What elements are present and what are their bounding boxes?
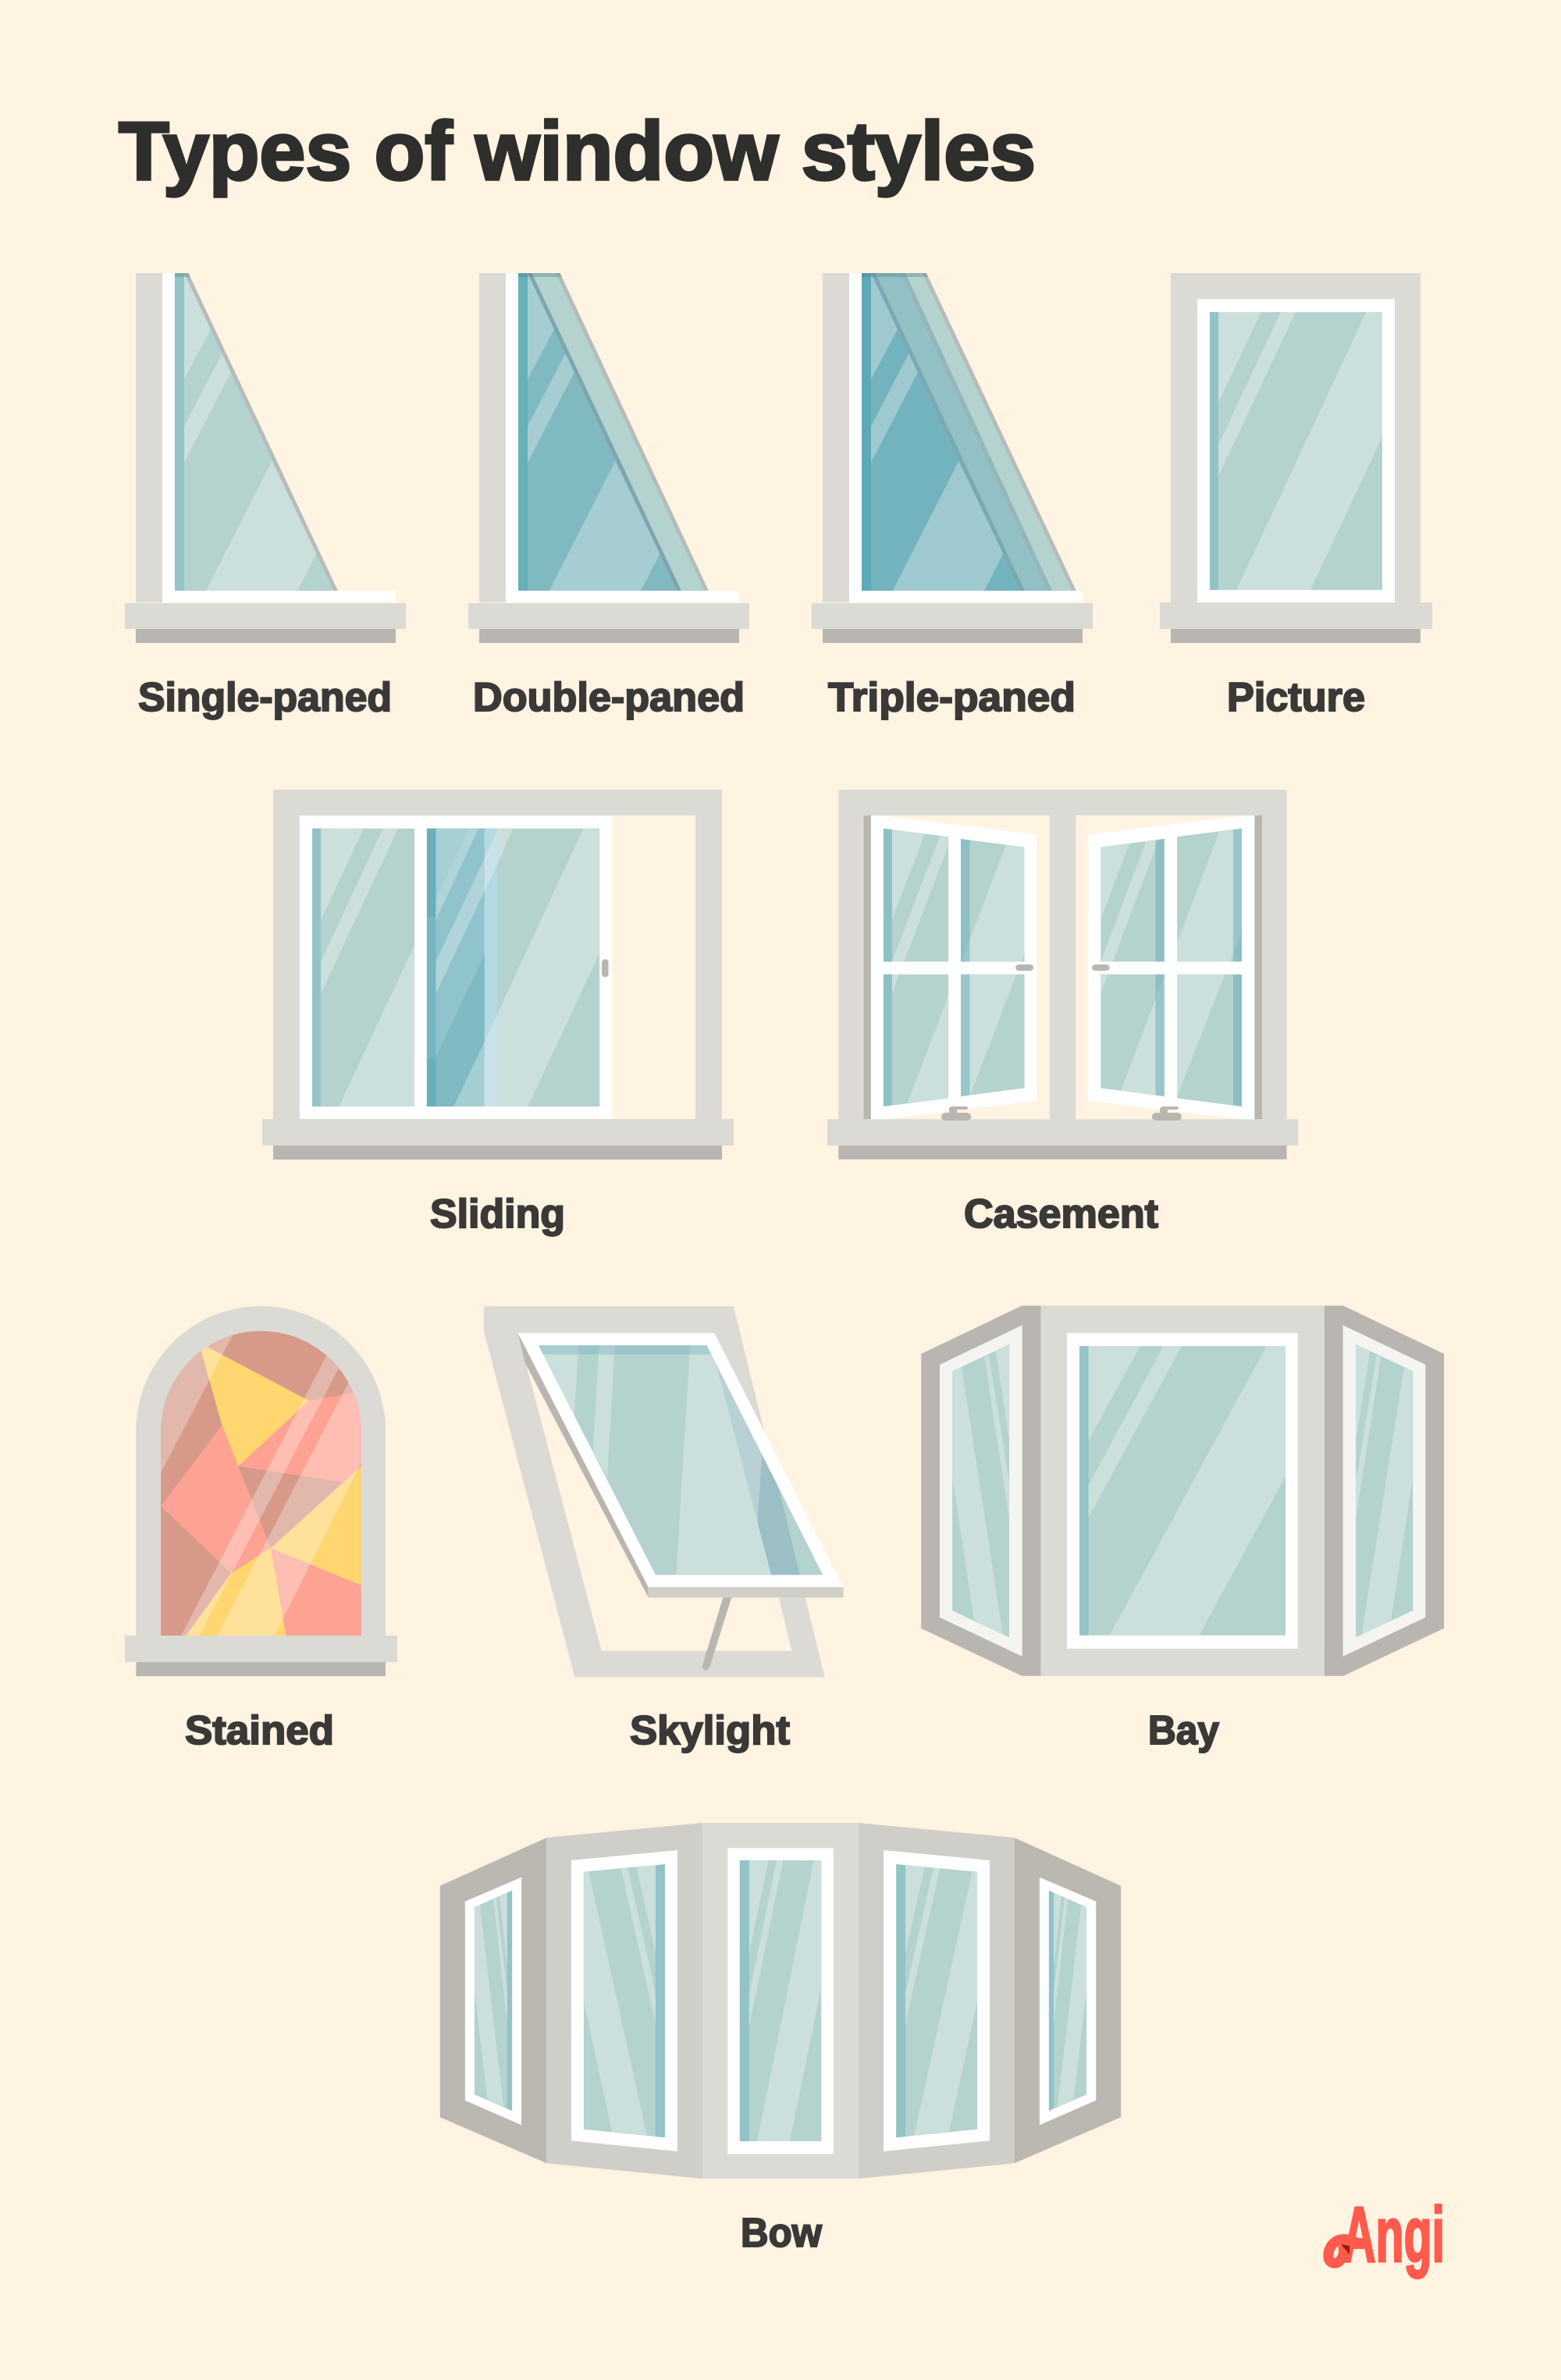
translucent light bands <box>161 1335 361 1636</box>
frame <box>273 790 722 1119</box>
window: single-paned <box>125 273 406 643</box>
mid left frame <box>546 1823 702 2179</box>
roof frame <box>484 1306 825 1677</box>
sill <box>125 1636 397 1662</box>
label: bay: Bay <box>1148 1708 1219 1753</box>
window: bow <box>440 1823 1121 2179</box>
left sash glass <box>884 829 1025 1107</box>
sill shadow <box>823 629 1083 643</box>
label: skylight: Skylight <box>630 1708 790 1753</box>
inner shadows <box>864 815 1262 1119</box>
outer left frame <box>440 1838 546 2163</box>
coloured shards <box>161 1347 368 1636</box>
white frame <box>506 273 739 602</box>
outer right frame <box>1015 1838 1121 2163</box>
white frame <box>849 273 1083 602</box>
logo wordmark: Angi <box>1342 2191 1445 2279</box>
sill <box>262 1119 734 1146</box>
right sash glass <box>1098 825 1245 1110</box>
sill shadow <box>136 1662 386 1676</box>
centre sash <box>1067 1333 1298 1649</box>
centre glass <box>740 1860 821 2141</box>
title: Types of window styles <box>119 105 1036 197</box>
handle <box>602 959 609 977</box>
wall and sill <box>125 273 406 629</box>
right side sash <box>1343 1325 1425 1657</box>
centre frame <box>702 1823 859 2179</box>
centre glass <box>1079 1346 1285 1636</box>
window: bay <box>921 1305 1444 1676</box>
infographic canvas <box>118 118 1444 2279</box>
prop arm <box>702 1594 733 1671</box>
sill shadow <box>136 629 396 643</box>
label: triple-paned: Triple-paned <box>828 675 1076 720</box>
logo swash fold <box>1341 2244 1349 2254</box>
logo swash <box>1328 2240 1360 2263</box>
right sash <box>1088 816 1254 1119</box>
sill <box>827 1119 1298 1146</box>
centre sash <box>727 1848 834 2154</box>
glass panes <box>518 273 709 591</box>
sash bottom edge <box>649 1587 844 1597</box>
label: sliding: Sliding <box>430 1192 565 1237</box>
left side sash <box>940 1325 1022 1657</box>
left side glass <box>952 1345 1009 1637</box>
wall and sill <box>468 273 749 629</box>
logo: Angi <box>1328 2191 1445 2279</box>
window: double-paned <box>468 273 749 643</box>
glass pane <box>1210 312 1382 590</box>
right side glass <box>1356 1345 1413 1637</box>
sill shadow <box>1171 629 1421 643</box>
window: skylight <box>484 1306 844 1677</box>
label: single-paned: Single-paned <box>138 675 392 720</box>
glass <box>530 1345 836 1576</box>
label: casement: Casement <box>964 1192 1158 1237</box>
glass pane <box>175 273 338 591</box>
window: stained <box>125 1306 406 1676</box>
sill shadow <box>838 1146 1287 1160</box>
window: casement <box>827 790 1298 1160</box>
sill shadow <box>479 629 739 643</box>
mid left window <box>571 1850 677 2151</box>
white sash <box>1197 299 1395 602</box>
open sash edge shadow <box>518 1333 649 1597</box>
window: sliding <box>262 790 734 1160</box>
left side frame <box>921 1305 1041 1676</box>
white frame <box>162 273 396 602</box>
window: triple-paned <box>812 273 1093 643</box>
right pane <box>427 829 599 1107</box>
outer left window <box>465 1877 521 2125</box>
stained glass <box>161 1331 361 1636</box>
white sash <box>300 816 612 1119</box>
label: picture: Picture <box>1227 675 1365 720</box>
handles and stays <box>941 964 1182 1121</box>
frame and sill <box>1160 273 1432 629</box>
left pane <box>312 829 414 1107</box>
label: bow: Bow <box>741 2211 823 2256</box>
label: double-paned: Double-paned <box>473 675 745 720</box>
centre frame <box>1041 1305 1325 1676</box>
mid right window <box>884 1850 990 2151</box>
window: picture <box>1160 273 1432 643</box>
sliding glass panes <box>312 829 599 1107</box>
arched frame <box>136 1306 386 1636</box>
sill shadow <box>273 1146 722 1160</box>
right side frame <box>1325 1305 1444 1676</box>
white sash <box>518 1333 844 1587</box>
wall and sill <box>812 273 1093 629</box>
left sash <box>871 816 1037 1119</box>
mid right frame <box>859 1823 1015 2179</box>
frame <box>838 790 1287 1119</box>
label: stained: Stained <box>185 1708 334 1753</box>
outer right window <box>1040 1877 1096 2125</box>
glass panes <box>862 273 1076 591</box>
